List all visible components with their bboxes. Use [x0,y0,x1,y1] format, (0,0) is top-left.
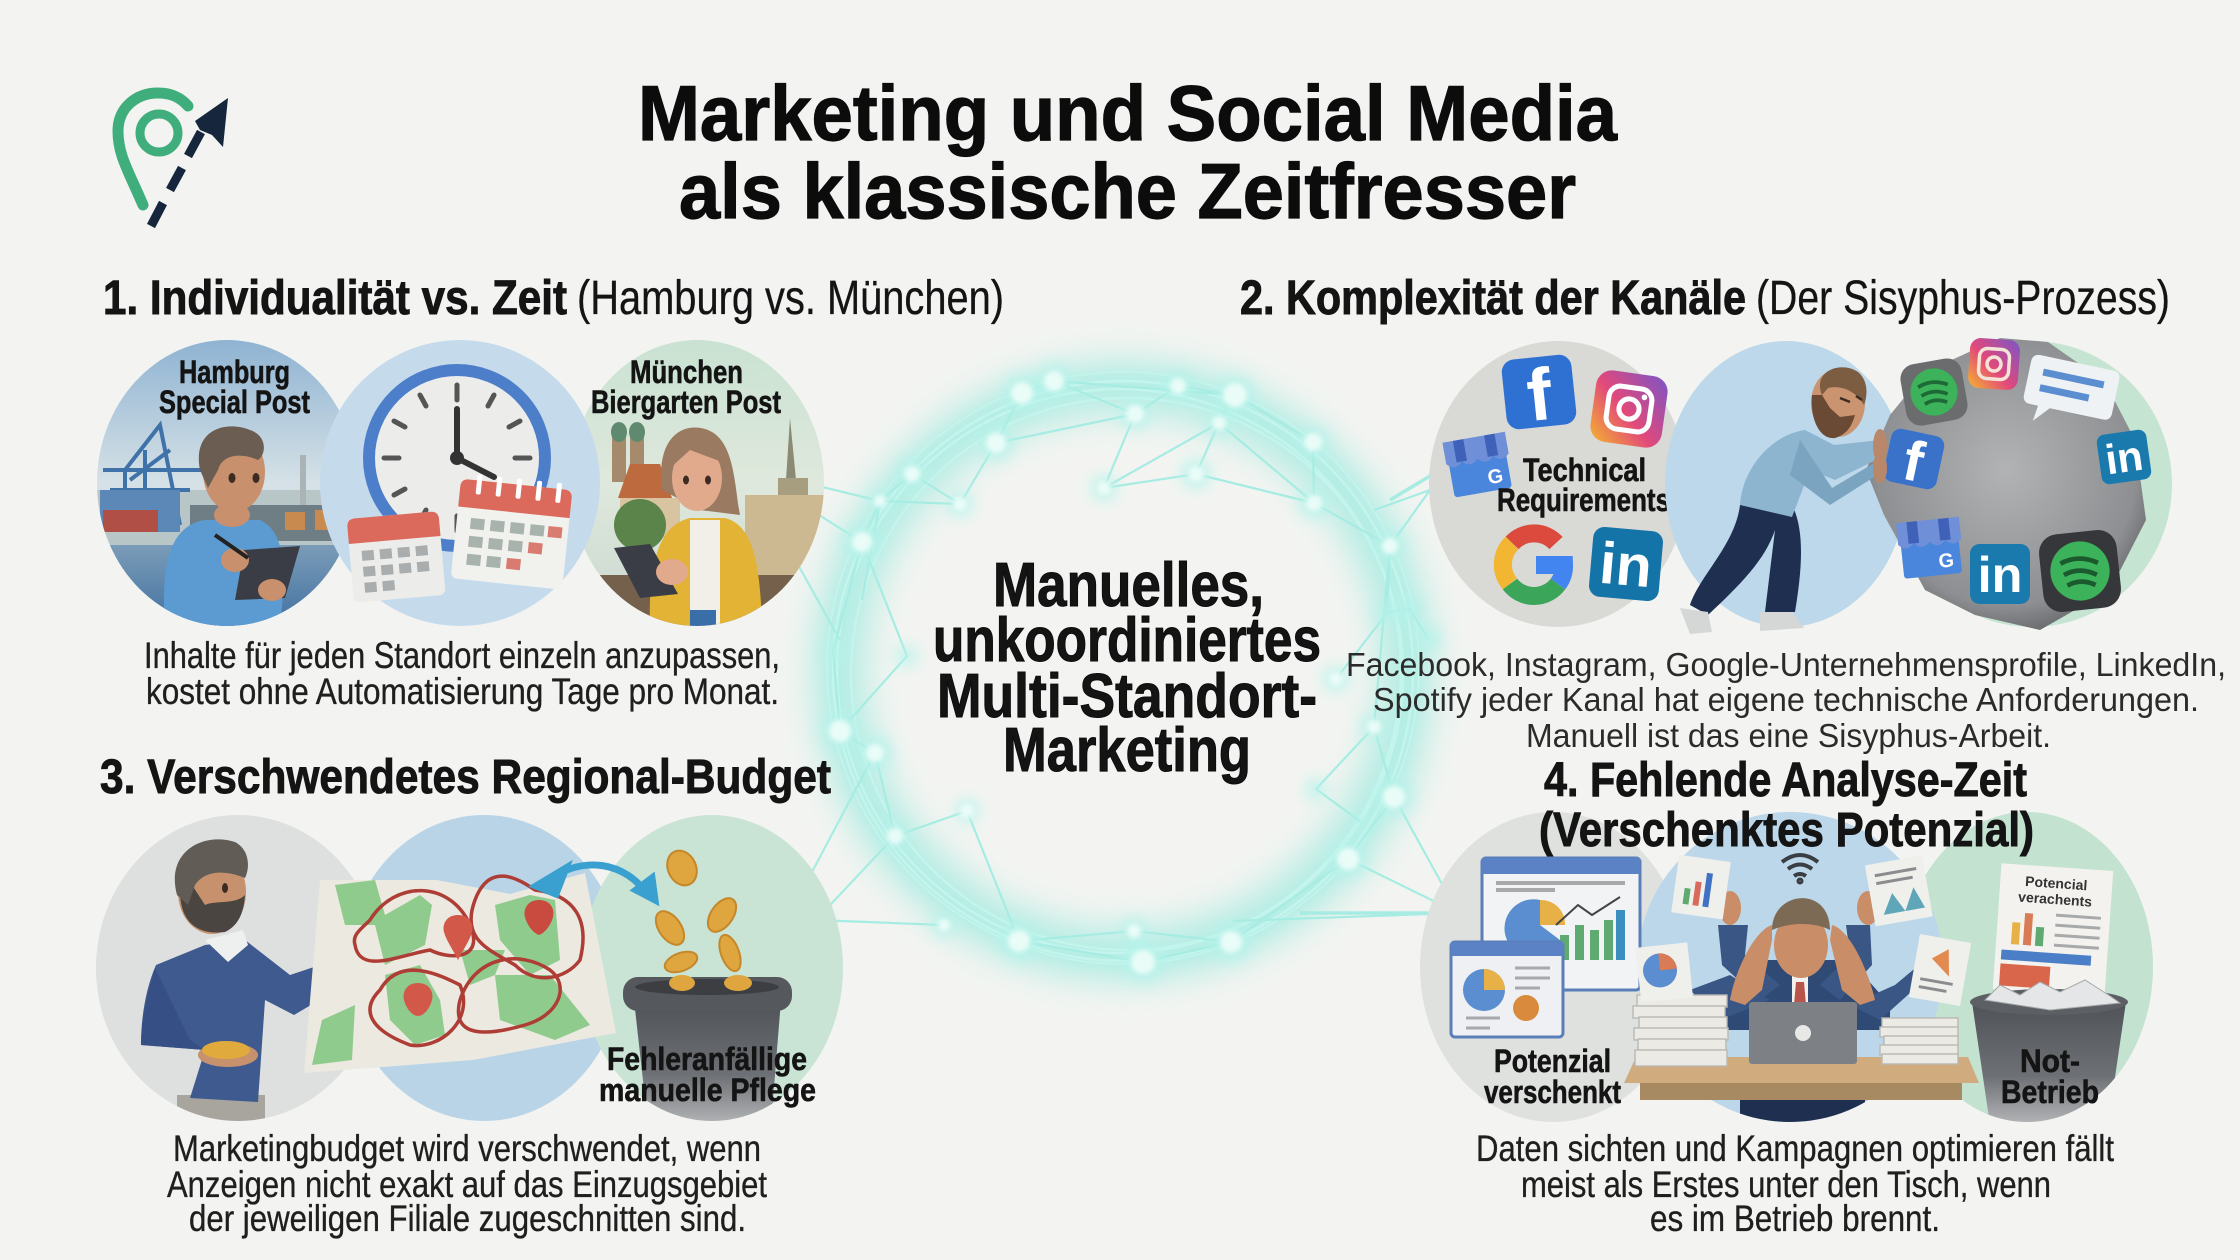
icon: Google Business on rock [1896,517,1965,579]
title: als klassische Zeitfresser [679,147,1576,235]
label: Fehleranfällige manuelle Pflege: manuelle Pflege [599,1072,816,1108]
panel 4: Fehlende Analyse-Zeit [1420,754,2153,1239]
laptop [1749,1002,1857,1064]
label: Hamburg Special Post: Hamburg [179,354,290,390]
report and trash bin: Potencial [2025,873,2088,893]
description 4: meist als Erstes unter den Tisch, wenn [1521,1164,2051,1205]
label: Fehleranfällige manuelle Pflege [599,1041,816,1108]
description 2: Manuell ist das eine Sisyphus-Arbeit. [1526,717,2051,754]
description 3: der jeweiligen Filiale zugeschnitten sind. [189,1198,746,1239]
falling coins and bin [623,846,792,1125]
circle: Hamburg harbour with man [97,340,359,630]
label: Hamburg Special Post [159,354,310,420]
heading 2: 2. Komplexität der Kanäle [1240,272,1746,325]
description 3: Anzeigen nicht exakt auf das Einzugsgebiet [167,1164,768,1205]
icon: Spotify top [1898,356,1970,428]
panel 1: Individualität vs. Zeit [97,272,1004,712]
central network ring [744,365,1475,981]
title [638,69,1618,235]
logo: location pin with dashed arrow [118,93,228,226]
report and trash bin [1970,863,2128,1125]
overwhelmed man at desk [1624,855,1979,1125]
map with regions and pins [304,873,616,1073]
label: München Biergarten Post: München [630,354,743,390]
central statement: Marketing [1003,716,1251,785]
circle: green backdrop [581,815,843,1121]
browser dashboards [1451,858,1640,1037]
description 1: kostet ohne Automatisierung Tage pro Monat. [146,671,779,712]
description 1: Inhalte für jeden Standort einzeln anzupassen, [144,635,780,676]
icon: red pin 1 [444,915,472,960]
icon: small calendar [347,511,446,603]
label: München Biergarten Post: Biergarten Post [591,384,781,420]
label: Technical Requirements: Technical [1523,452,1646,488]
heading 1 [103,272,1004,325]
icon: LinkedIn: in [1597,531,1655,600]
heading 4: (Verschenktes Potenzial) [1539,804,2034,857]
icon: wifi [1782,855,1818,882]
label: Not-Betrieb: Not- [2020,1043,2080,1079]
icon: LinkedIn on rock bottom: in [1978,546,2022,603]
icon: chat bubble [2019,353,2121,437]
central statement [933,551,1321,785]
icon: red pin 3 [404,983,432,1016]
icon: Instagram [1588,368,1670,450]
description 1 [144,635,780,712]
heading 3: 3. Verschwendetes Regional-Budget [100,751,831,804]
icon: Google G [1503,533,1564,596]
icon: Facebook: f [1523,352,1556,437]
label: Potenzial verschenkt: verschenkt [1484,1074,1621,1110]
rock with channel icons [1866,337,2152,630]
circle: grey backdrop [1420,812,1686,1122]
circle: München with woman [570,340,830,630]
man pushing the rock [1680,367,1887,634]
label: München Biergarten Post [591,354,781,420]
heading 1: 1. Individualität vs. Zeit [103,272,567,325]
icon: large calendar [451,473,573,590]
icon: LinkedIn [1588,526,1664,602]
label: Not-Betrieb [2001,1043,2099,1110]
large browser window [1482,858,1640,990]
icon: LinkedIn on rock right: in [2102,432,2146,483]
label: Potenzial verschenkt: Potenzial [1494,1043,1611,1079]
description 3 [167,1128,768,1239]
icon: Google Business [1442,432,1515,498]
title: Marketing und Social Media [638,69,1618,157]
central statement: Manuelles, [993,551,1264,620]
icon: Facebook on rock [1880,426,1946,498]
report and trash bin: verachents [2018,889,2093,910]
label: Technical Requirements: Requirements [1497,482,1670,518]
icon: Instagram top [1967,337,2021,391]
small browser window [1451,942,1563,1037]
central statement: unkoordiniertes [933,606,1321,675]
icon: red pin 2 [525,900,553,935]
description 2: Spotify jeder Kanal hat eigene technische Anforderungen. [1373,681,2199,718]
circle: man with coins [96,815,622,1125]
circle: blue backdrop [1665,341,1907,627]
icon: Spotify bottom [2037,528,2123,614]
label: Hamburg Special Post: Special Post [159,384,310,420]
label: Potenzial verschenkt [1484,1043,1621,1110]
description 3: Marketingbudget wird verschwendet, wenn [173,1128,761,1169]
icon: Google Business: G [1486,465,1505,489]
description 4: Daten sichten und Kampagnen optimieren fällt [1476,1128,2115,1169]
description 4: es im Betrieb brennt. [1650,1198,1940,1239]
held papers [1636,855,1971,1006]
circle: green backdrop [1892,341,2172,627]
circle: blue backdrop [1637,812,1943,1122]
description 2 [1346,646,2226,754]
label: Technical Requirements [1497,452,1670,518]
desk [1624,1057,1979,1083]
heading 1: (Hamburg vs. München) [577,272,1004,325]
circle: green backdrop [1901,812,2153,1122]
circle: channel icons [1429,341,1687,627]
description 4 [1476,1128,2115,1239]
central statement: Multi-Standort- [937,662,1317,731]
icon: Google Business on rock: G [1937,549,1955,573]
heading 4 [1539,754,2034,857]
circle: clock and calendars [320,340,600,626]
icon: Facebook on rock: f [1898,429,1929,495]
description 2: Facebook, Instagram, Google-Unternehmensprofile, LinkedIn, [1346,646,2226,683]
label: Fehleranfällige manuelle Pflege: Fehleranfällige [607,1041,807,1077]
icon: Facebook [1500,350,1578,439]
paper stacks [1633,995,1958,1066]
panel 3: Verschwendetes Regional-Budget [96,751,843,1239]
panel 2: Komplexität der Kanäle [1240,272,2226,754]
arrow: map to bin [536,865,655,900]
heading 4: 4. Fehlende Analyse-Zeit [1544,754,2027,807]
heading 2 [1240,272,2170,325]
label: Not-Betrieb: Betrieb [2001,1074,2099,1110]
